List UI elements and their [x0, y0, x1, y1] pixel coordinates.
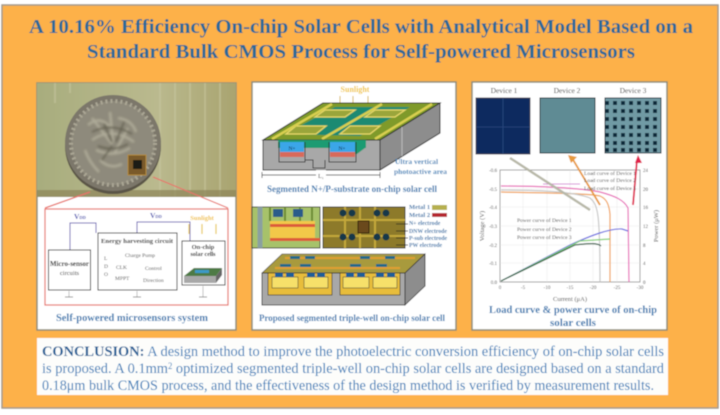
- block diagram: MPPT: [115, 276, 130, 282]
- photo: coin with chip: [37, 83, 236, 197]
- legend: metals and electrodes: N+ electrode: [409, 221, 441, 227]
- chart legends: Power curve of Device 2: [517, 226, 572, 233]
- chart: load and power curves: Power (μW): [653, 210, 660, 242]
- chart: load and power curves: -5: [521, 286, 526, 291]
- legend: metals and electrodes: Metal 1: [409, 204, 430, 211]
- block diagram: O: [104, 272, 108, 278]
- block diagram: solar cells: [190, 252, 216, 258]
- conclusion box: [37, 338, 668, 395]
- arrows to devices: [510, 158, 590, 210]
- caption: load and power curve: Load curve & power curve of on-chip: [489, 304, 657, 316]
- chart: load and power curves: 20: [643, 188, 648, 193]
- chart legends: Power curve of Device 3: [517, 234, 572, 241]
- chart: load and power curves: 8: [643, 244, 646, 249]
- chart: load and power curves: -0.3: [489, 225, 497, 230]
- chart legends: Load curve of Device 2: [584, 177, 636, 184]
- caption: segmented N+/P-substrate: Segmented N+/P-substrate on-chip solar cell: [267, 184, 437, 194]
- caption: load and power curve: solar cells: [550, 317, 597, 329]
- chart: load and power curves: 0: [499, 286, 502, 291]
- chart legends: Power curve of Device 1: [517, 217, 572, 224]
- block diagram: On-chip: [192, 244, 215, 251]
- panel: device measurements: [472, 82, 667, 330]
- label: ultra vertical photoactive area: Ultra vertical: [395, 157, 438, 166]
- chart: load and power curves: 16: [643, 206, 648, 211]
- chart: load and power curves: -30: [637, 286, 644, 291]
- diagram: segmented N+/P-substrate solar cell: L₁: [318, 174, 324, 180]
- chart: load and power curves: -20: [590, 286, 597, 291]
- block diagram: Energy harvesting circuit: [101, 238, 174, 245]
- block diagram: Direction: [143, 278, 164, 284]
- caption: self-powered microsensors system: Self-powered microsensors system: [56, 313, 208, 324]
- chart: load and power curves: 12: [643, 225, 648, 230]
- block diagram: CLK: [116, 265, 127, 271]
- caption: load and power curve: [489, 304, 657, 329]
- conclusion box: is proposed. A 0.1mm: [42, 361, 173, 377]
- device photos: Device 1: [491, 86, 518, 95]
- red zoom lines: [45, 177, 228, 305]
- block diagram: VDD: [150, 211, 163, 220]
- block diagram: circuits: [60, 270, 80, 277]
- chart legends: Load curve of Device 1: [584, 170, 636, 177]
- panel: self-powered microsensors system: [37, 83, 236, 330]
- chart: load and power curves: -0.2: [489, 244, 497, 249]
- caption: triple-well solar cell: Proposed segmented triple-well on-chip solar cell: [259, 314, 445, 324]
- block diagram: Charge Pump: [125, 253, 155, 259]
- title: Standard Bulk CMOS Process for Self-powered Microsensors: [87, 41, 635, 63]
- block diagram: Control: [145, 266, 162, 272]
- device photos: Device 2: [554, 86, 581, 95]
- inset: top-view layout: [323, 207, 405, 248]
- diagram: segmented N+/P-substrate solar cell: N+: [338, 146, 346, 152]
- legend: metals and electrodes: Metal 2: [409, 212, 430, 219]
- label: ultra vertical photoactive area: [394, 157, 447, 176]
- legend: metals and electrodes: P-sub electrode: [409, 236, 447, 242]
- chart: load and power curves: -0.1: [489, 262, 497, 267]
- chart: load and power curves: -10: [544, 286, 551, 291]
- legend: metals and electrodes: DNW electrode: [409, 229, 447, 235]
- diagram: triple-well solar cell: [262, 254, 425, 305]
- chart: load and power curves: 24: [643, 169, 648, 174]
- legend: metals and electrodes: PW electrode: [409, 243, 443, 249]
- inset: cross-section layout: [252, 207, 320, 248]
- diagram: segmented N+/P-substrate solar cell: N+: [288, 146, 296, 152]
- block diagram: [48, 211, 225, 297]
- conclusion box: optimized segmented triple-well on-chip solar cells are designed based on a standard: [172, 361, 664, 377]
- legend: metals and electrodes: [396, 204, 447, 249]
- chart: load and power curves: Current (μA): [553, 296, 587, 303]
- conclusion box: 2: [168, 361, 172, 371]
- chart legends: Load curve of Device 3: [584, 185, 636, 192]
- conclusion box: CONCLUSION: A design method to improve the photoelectric conversion efficiency of on-chip solar cells: [42, 344, 664, 360]
- block diagram: L: [104, 256, 108, 262]
- panel: solar cell structures: [252, 82, 456, 330]
- diagram: segmented N+/P-substrate solar cell: Sunlight: [341, 85, 370, 94]
- device photos: [476, 86, 661, 154]
- block diagram: D: [104, 264, 108, 270]
- chart: load and power curves: -0.6: [489, 169, 497, 174]
- title: [29, 16, 693, 63]
- diagram: segmented N+/P-substrate solar cell: [262, 85, 440, 180]
- conclusion box: 0.18μm bulk CMOS process, and the effectiveness of the design method is verified by measurement results.: [42, 378, 654, 394]
- chart: load and power curves: 0: [643, 281, 646, 286]
- chart: load and power curves: -15: [567, 286, 574, 291]
- title: A 10.16% Efficiency On-chip Solar Cells with Analytical Model Based on a: [29, 16, 693, 38]
- chart: load and power curves: 4: [643, 262, 646, 267]
- chart: load and power curves: [479, 155, 660, 303]
- label: ultra vertical photoactive area: photoactive area: [394, 167, 447, 176]
- chart: load and power curves: -25: [614, 286, 621, 291]
- chart: load and power curves: -0.5: [489, 188, 497, 193]
- block diagram: Sunlight: [190, 215, 215, 222]
- device photos: Device 3: [620, 86, 647, 95]
- chart: load and power curves: Voltage (V): [479, 211, 486, 241]
- chart: load and power curves: -0.4: [489, 206, 497, 211]
- block diagram: Micro-sensor: [50, 260, 89, 268]
- chart: load and power curves: 0.0: [491, 281, 498, 286]
- block diagram: VDD: [74, 212, 87, 221]
- chart legends: [517, 170, 636, 241]
